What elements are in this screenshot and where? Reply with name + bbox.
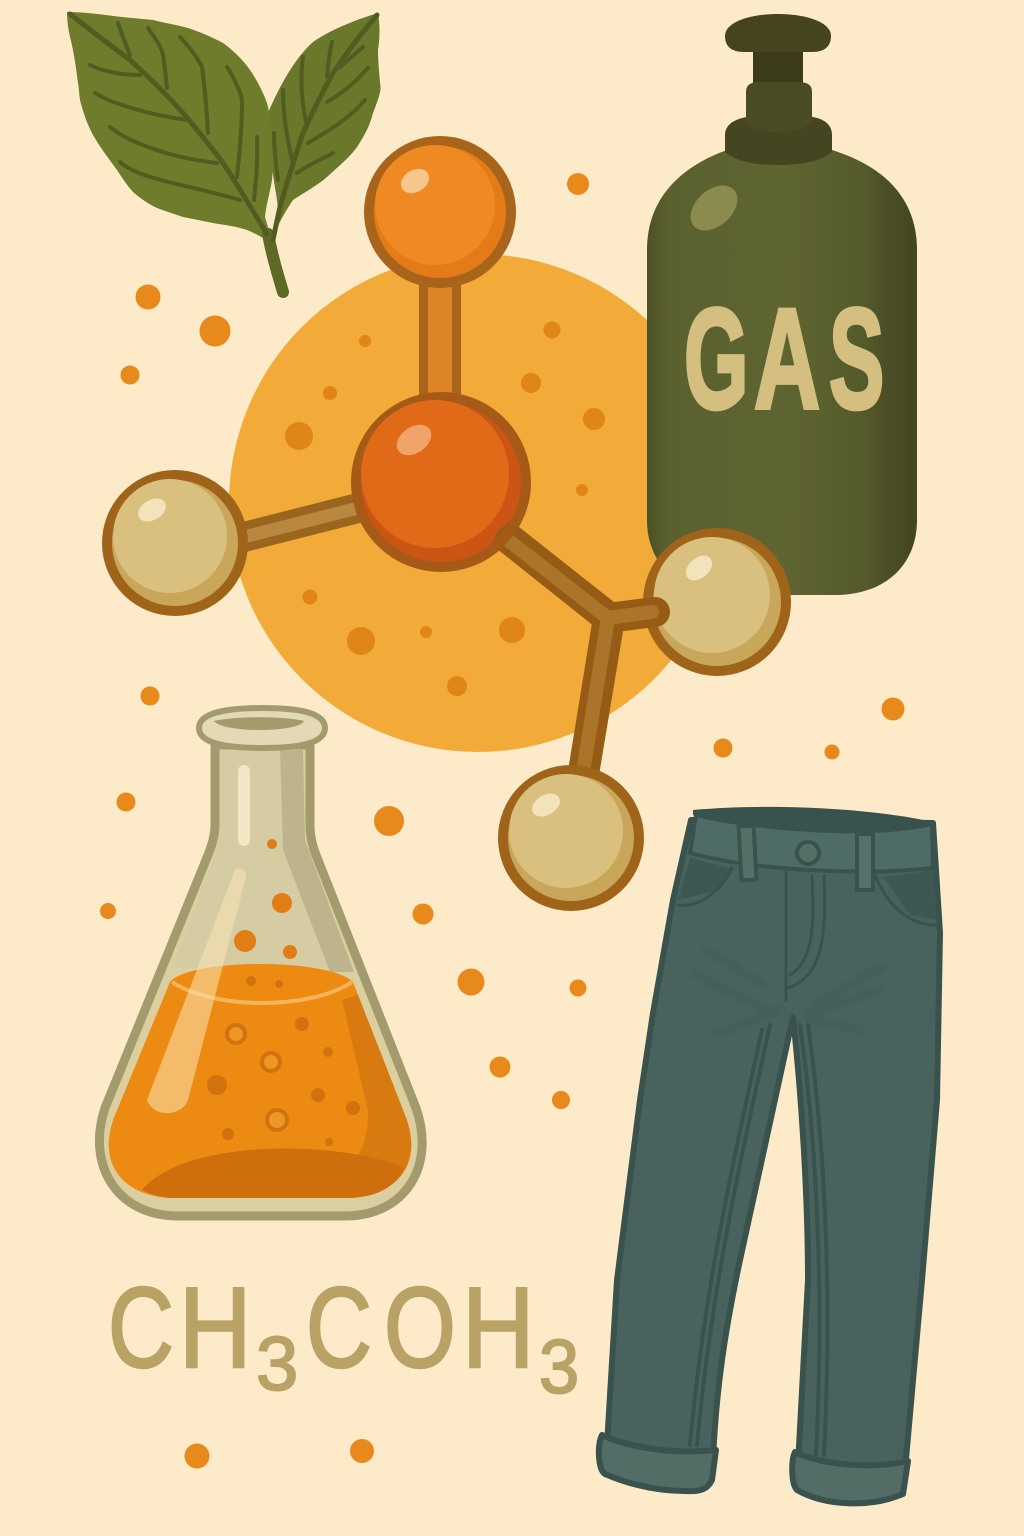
chemical formula (108, 1264, 579, 1409)
waist opening (693, 807, 933, 831)
right cuff (792, 1452, 908, 1503)
chemical formula: C (306, 1264, 372, 1391)
valve cap (725, 14, 831, 52)
right leaf veins (273, 15, 377, 240)
bonds (240, 280, 610, 780)
liquid (109, 964, 411, 1198)
molecule model (107, 141, 786, 906)
scattered dots on circle (285, 322, 605, 696)
button (797, 842, 819, 864)
liquid right shade (300, 995, 411, 1198)
leg seams (690, 1025, 827, 1455)
label GAS: S (829, 278, 884, 439)
right leaf (268, 13, 381, 240)
chemical formula: 3 (539, 1324, 579, 1409)
top orange atom (369, 141, 511, 283)
icon: jeans (599, 807, 940, 1503)
glass inner tint (172, 750, 352, 968)
bottom atom (503, 770, 639, 906)
left atom (107, 475, 243, 611)
scattered dots on background (100, 173, 904, 1468)
waistband (690, 815, 933, 871)
chemical formula: C (108, 1264, 174, 1391)
belt loops (739, 826, 873, 890)
left cuff (599, 1435, 716, 1491)
stem (268, 234, 283, 292)
chemical formula: O (384, 1264, 456, 1391)
chemical formula: H (179, 1264, 251, 1391)
seams and pockets (678, 868, 936, 1000)
centre atom (356, 397, 526, 567)
label GAS: A (754, 279, 820, 439)
liquid surface line (172, 982, 352, 1003)
chemical formula: H (462, 1264, 534, 1391)
icon: leaves (67, 12, 381, 292)
collar (725, 116, 832, 165)
cylinder body (647, 150, 917, 595)
valve stem (753, 48, 803, 90)
neck highlight (238, 765, 250, 846)
valve block (746, 82, 812, 132)
label GAS: G (684, 278, 749, 439)
glass highlight (147, 868, 246, 1113)
left leaf (67, 12, 273, 240)
glass shade (280, 750, 354, 972)
pocket shadows (678, 858, 730, 900)
label GAS (684, 278, 884, 439)
centre atom rim overlay (490, 482, 526, 551)
large orange circle (229, 254, 727, 752)
chemical formula: 3 (256, 1322, 298, 1407)
icon: gas cylinder (647, 14, 917, 595)
wrinkles (695, 950, 885, 1035)
lower bond joint (500, 532, 655, 772)
flask glass (99, 745, 422, 1216)
left leaf veins (70, 14, 267, 234)
legs (607, 820, 940, 1470)
flask rim (199, 708, 325, 748)
right atom (648, 533, 786, 671)
icon: flask (99, 708, 422, 1216)
liquid bottom shade (142, 1149, 404, 1198)
bubbles (234, 839, 297, 959)
highlight (682, 177, 746, 239)
